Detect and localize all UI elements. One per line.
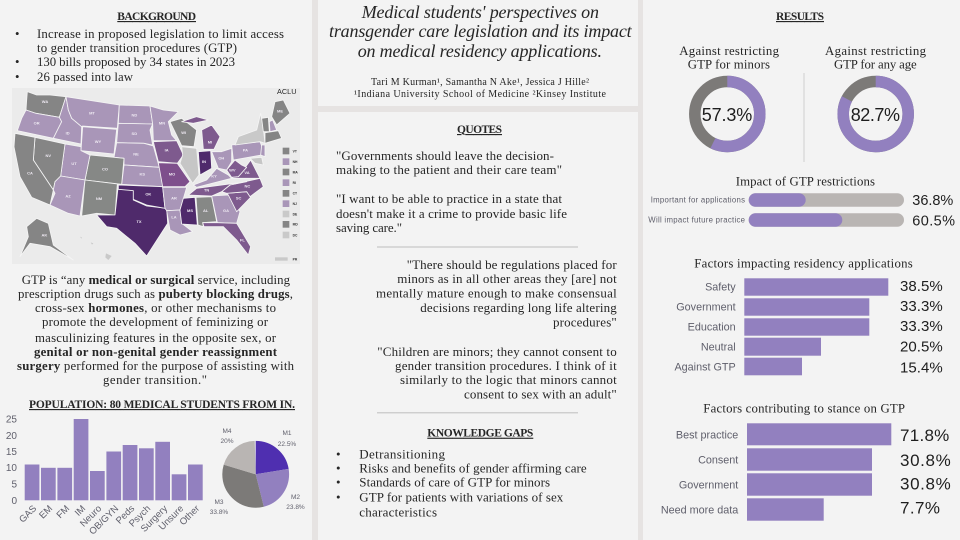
bar chart: factors impacting residency applications: Education	[688, 322, 736, 334]
text block: GTP definition: genital or non-genital gender reassignment	[34, 345, 278, 359]
pie chart: medical school year: 23.8%	[286, 504, 305, 511]
map: US states legislation: GA	[223, 208, 229, 213]
text block: background bullets: Increase in proposed legislation to limit access	[37, 27, 284, 41]
bar chart: specialty interest: 15	[6, 447, 17, 458]
bar chart: specialty interest: EM	[37, 503, 55, 521]
map: US states legislation: WY	[95, 139, 102, 144]
map: US states legislation: OR	[34, 121, 40, 126]
title	[329, 2, 633, 61]
text block: knowledge gaps bullets: •	[336, 475, 341, 490]
quotes against restrictions: saving care."	[336, 220, 402, 235]
text block: background bullets	[15, 27, 284, 84]
text block: knowledge gaps bullets	[336, 447, 587, 520]
title: on medical residency applications.	[358, 41, 602, 61]
map: US states legislation: MA	[293, 170, 298, 174]
donut: against restricting for any age: 82.7%	[851, 105, 900, 125]
map: US states legislation: PR	[293, 257, 298, 261]
donut: against restricting for any age: GTP for any age	[834, 57, 917, 71]
text block: GTP definition: cross-sex hormones, or other mechanisms to	[35, 301, 276, 315]
donut: against restricting for minors: 57.3%	[702, 105, 752, 125]
map: US states legislation: NJ	[293, 202, 297, 206]
text block: knowledge gaps bullets: •	[336, 490, 341, 505]
donut: against restricting for any age	[825, 44, 927, 146]
quotes against restrictions: "I want to be able to practice in a state that	[336, 191, 562, 206]
map: US states legislation: VA	[244, 170, 250, 175]
title: Medical students' perspectives on	[361, 2, 599, 22]
bar chart: specialty interest: 20	[6, 431, 17, 442]
bar chart: specialty interest: Other	[178, 503, 202, 528]
quotes against restrictions: doesn't make it a crime to provide basic life	[336, 206, 567, 221]
bar chart: specialty interest: 25	[6, 414, 17, 426]
text block: background bullets: •	[15, 55, 19, 69]
quotes supporting restrictions	[376, 257, 617, 402]
donut: against restricting for any age: Against restricting	[825, 44, 927, 58]
map: US states legislation: NM	[96, 196, 103, 201]
map: US states legislation: OK	[145, 191, 151, 196]
text block: knowledge gaps bullets: GTP for patients with variations of sex	[359, 490, 564, 505]
panel: background	[0, 0, 312, 540]
map: US states legislation: AR	[171, 195, 177, 200]
map: US states legislation: SD	[132, 131, 137, 136]
quotes supporting restrictions: "There should be regulations placed for	[407, 257, 617, 272]
text block: knowledge gaps bullets: Detransitioning	[359, 447, 446, 462]
map: US states legislation: AL	[203, 208, 209, 213]
bar chart: specialty interest: Unsure	[157, 503, 186, 533]
map: US states legislation: PA	[243, 148, 248, 153]
pie chart: medical school year	[210, 428, 305, 516]
text block: GTP definition: masculinizing features in the opposite sex, or	[35, 331, 277, 345]
map: US states legislation: WI	[181, 130, 186, 135]
text block: GTP definition: gender transition."	[103, 373, 207, 387]
quotes against restrictions: "Governments should leave the decision-	[336, 148, 554, 163]
panel: quotes and knowledge gaps	[318, 112, 638, 540]
heading: knowledge gaps: KNOWLEDGE GAPS	[427, 428, 533, 440]
bar chart: specialty interest: OB/GYN	[87, 503, 121, 537]
chart: impact of GTP restrictions: 60.5%	[912, 214, 955, 230]
map: US states legislation: MN	[159, 121, 165, 126]
bar chart: factors contributing to stance on GTP: Best practice	[676, 429, 738, 441]
panel: title	[318, 0, 638, 106]
map: US states legislation: WA	[42, 99, 48, 104]
map: US states legislation: KY	[211, 174, 217, 179]
chart: impact of GTP restrictions: Impact of GTP restrictions	[736, 175, 875, 189]
map: US states legislation: NE	[133, 152, 139, 157]
text block: knowledge gaps bullets: •	[336, 447, 341, 462]
text block: knowledge gaps bullets: •	[336, 461, 341, 476]
map: US states legislation: CO	[102, 166, 108, 171]
bar chart: factors impacting residency applications	[674, 257, 943, 376]
map: US states legislation: VT	[293, 149, 297, 153]
authors and affiliations	[354, 77, 607, 100]
quotes supporting restrictions: decisions regarding long life altering	[420, 300, 617, 315]
bar chart: factors impacting residency applications: Factors impacting residency applications	[694, 257, 913, 271]
bar chart: factors impacting residency applications: Government	[676, 302, 736, 314]
bar chart: factors contributing to stance on GTP: 30.8%	[900, 474, 951, 493]
text block: GTP definition: GTP is “any medical or surgical service, including	[22, 273, 291, 287]
text block: GTP definition: promote the development of feminizing or	[42, 315, 269, 329]
map: US states legislation: CA	[27, 170, 33, 175]
map: US states legislation: LA	[171, 215, 177, 220]
authors and affiliations: ¹Indiana University School of Medicine ²Kinsey Institute	[354, 89, 607, 100]
quotes against restrictions	[336, 148, 567, 235]
heading: background: BACKGROUND	[117, 11, 196, 23]
map: US states legislation: FL	[240, 237, 245, 242]
bar chart: factors impacting residency applications: 33.3%	[900, 298, 943, 315]
map: US states legislation: ID	[66, 131, 70, 136]
bar chart: specialty interest	[6, 414, 203, 537]
bar chart: factors contributing to stance on GTP: Government	[679, 479, 738, 491]
pie chart: medical school year: M1	[282, 430, 292, 437]
pie chart: medical school year: M3	[214, 499, 224, 506]
map: US states legislation: ACLU	[277, 87, 296, 96]
bar chart: factors contributing to stance on GTP: 71.8%	[900, 426, 949, 445]
bar chart: specialty interest: 0	[11, 496, 17, 507]
bar chart: specialty interest: Surgery	[139, 503, 170, 535]
bar chart: specialty interest: IM	[73, 503, 88, 519]
panel: results	[643, 0, 960, 540]
text block: background bullets: 130 bills proposed by 34 states in 2023	[37, 55, 235, 69]
map: US states legislation: TX	[136, 219, 142, 224]
text block: knowledge gaps bullets: Standards of care of GTP for minors	[359, 475, 550, 490]
chart: impact of GTP restrictions: Important for applications	[651, 195, 745, 204]
quotes supporting restrictions: consent to sex with an adult"	[464, 387, 617, 402]
map: US states legislation: KS	[140, 172, 145, 177]
bar chart: factors contributing to stance on GTP: 30.8%	[900, 451, 951, 470]
bar chart: factors contributing to stance on GTP: Consent	[698, 454, 738, 466]
bar chart: specialty interest: 5	[11, 480, 17, 490]
map: US states legislation: NV	[46, 153, 51, 158]
bar chart: specialty interest: GAS	[17, 503, 39, 525]
map: US states legislation: TN	[204, 188, 209, 193]
quotes supporting restrictions: gender transition procedures. I think of it	[395, 358, 617, 373]
bar chart: factors impacting residency applications: 15.4%	[900, 359, 943, 376]
map: US states legislation: RI	[293, 181, 296, 185]
bar chart: factors impacting residency applications: 38.5%	[900, 278, 943, 295]
text block: background bullets: to gender transition procedures (GTP)	[37, 41, 237, 55]
map: US states legislation: MI	[208, 139, 212, 144]
quotes supporting restrictions: similarly to the logic that minors cannot	[400, 372, 617, 387]
map: US states legislation: UT	[71, 161, 77, 166]
pie chart: medical school year: M4	[222, 428, 232, 435]
pie chart: medical school year: 20%	[220, 438, 234, 445]
bar chart: specialty interest: 10	[6, 463, 17, 474]
text block: GTP definition	[17, 273, 295, 387]
chart: impact of GTP restrictions: 36.8%	[912, 193, 953, 209]
bar chart: specialty interest: Peds	[114, 503, 137, 526]
map: US states legislation: DE	[293, 212, 298, 216]
map: US states legislation: SC	[236, 196, 242, 201]
map: US states legislation: MD	[293, 223, 298, 227]
map: US states legislation: CT	[293, 192, 297, 196]
text block: knowledge gaps bullets: characteristics	[359, 505, 437, 520]
map: US states legislation: NH	[293, 160, 298, 164]
map: US states legislation	[12, 87, 300, 264]
chart: impact of GTP restrictions	[648, 175, 955, 230]
bar chart: factors impacting residency applications: 33.3%	[900, 318, 943, 335]
pie chart: medical school year: 33.8%	[210, 509, 228, 516]
authors and affiliations: Tari M Kurman¹, Samantha N Ake¹, Jessica J Hille²	[371, 77, 589, 88]
map: US states legislation: WV	[229, 167, 236, 172]
map: US states legislation: AK	[41, 232, 47, 237]
map: US states legislation: ME	[277, 108, 283, 113]
map: US states legislation: ND	[131, 112, 137, 117]
text block: background bullets: •	[15, 70, 19, 84]
chart: impact of GTP restrictions: Will impact future practice	[648, 216, 745, 225]
map: US states legislation: MS	[187, 208, 193, 213]
map: US states legislation: DC	[293, 233, 298, 237]
bar chart: factors contributing to stance on GTP	[661, 402, 951, 521]
donut: against restricting for minors: Against restricting	[679, 44, 780, 58]
bar chart: specialty interest: Psych	[127, 503, 153, 529]
map: US states legislation: IA	[165, 147, 169, 152]
bar chart: factors impacting residency applications: 20.5%	[900, 339, 943, 356]
bar chart: factors contributing to stance on GTP: Factors contributing to stance on GTP	[703, 402, 905, 416]
quotes supporting restrictions: "Children are minors; they cannot consent to	[377, 344, 617, 359]
quotes against restrictions: making to the patient and their care team"	[336, 162, 562, 177]
donut: against restricting for minors	[679, 44, 780, 146]
bar chart: specialty interest: FM	[55, 503, 72, 521]
donut: against restricting for minors: GTP for minors	[688, 57, 770, 71]
map: US states legislation: MO	[169, 172, 175, 177]
map: US states legislation: NC	[244, 184, 250, 189]
text block: knowledge gaps bullets: Risks and benefits of gender affirming care	[359, 461, 587, 476]
bar chart: factors contributing to stance on GTP: 7.7%	[900, 498, 940, 517]
heading: population: POPULATION: 80 MEDICAL STUDENTS FROM IN.	[29, 399, 295, 411]
quotes supporting restrictions: mentally mature enough to make consensual	[376, 286, 617, 301]
title: transgender care legislation and its impact	[329, 21, 633, 41]
bar chart: specialty interest: Neuro	[78, 503, 104, 529]
pie chart: medical school year: 22.5%	[278, 441, 296, 448]
text block: GTP definition: surgery performed for the purpose of assisting with	[17, 359, 295, 373]
quotes supporting restrictions: minors as in all other areas they [are] not	[397, 271, 617, 286]
map: US states legislation: MT	[89, 111, 95, 116]
text block: background bullets: •	[15, 27, 19, 41]
text block: GTP definition: prescription drugs such as puberty blocking drugs,	[18, 287, 293, 301]
map: US states legislation: OH	[218, 155, 224, 160]
bar chart: factors contributing to stance on GTP: Need more data	[661, 504, 738, 516]
quotes supporting restrictions: procedures"	[553, 315, 617, 330]
pie chart: medical school year: M2	[291, 494, 300, 501]
bar chart: factors impacting residency applications: Safety	[705, 282, 736, 294]
heading: quotes: QUOTES	[457, 124, 502, 136]
heading: results: RESULTS	[776, 11, 824, 23]
bar chart: factors impacting residency applications: Neutral	[701, 341, 736, 353]
text block: background bullets: 26 passed into law	[37, 70, 134, 84]
bar chart: factors impacting residency applications: Against GTP	[674, 361, 736, 373]
map: US states legislation: AZ	[65, 194, 71, 199]
map: US states legislation: IN	[202, 159, 206, 164]
